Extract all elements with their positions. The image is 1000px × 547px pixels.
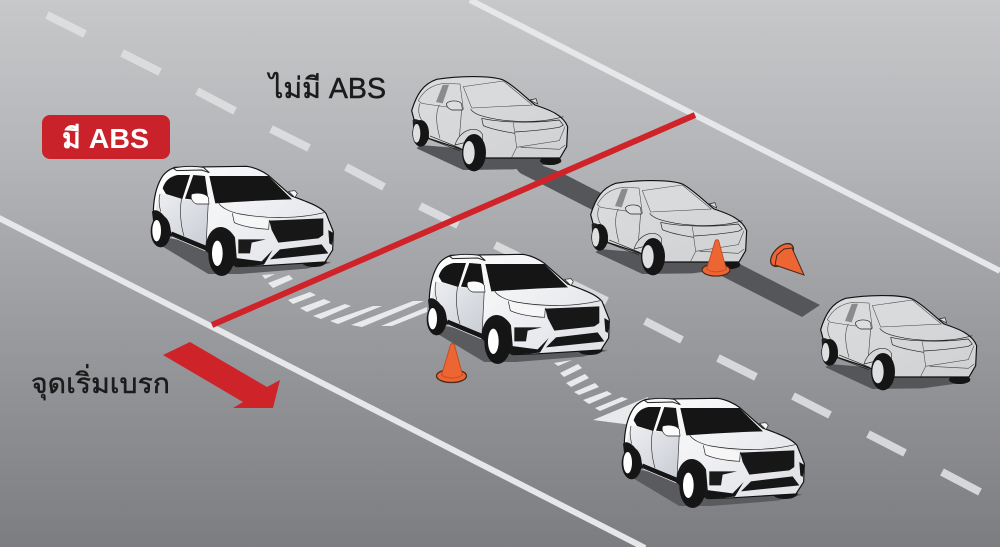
- road edge line: top: [470, 0, 1000, 271]
- label badge: with ABS: [42, 115, 170, 159]
- car: with ABS, position 2: [427, 254, 610, 364]
- label badge: with ABS: มี ABS: [62, 123, 149, 154]
- red arrow: braking direction: [163, 342, 280, 408]
- label: braking start point: จุดเริ่มเบรก: [31, 364, 170, 401]
- traffic cone: tipped over: [766, 239, 804, 275]
- label: without ABS: ไม่มี ABS: [267, 71, 386, 105]
- car: with ABS, position 1: [151, 166, 334, 276]
- car: no ABS, position 3: [821, 296, 977, 390]
- brake stripes: first group: [262, 274, 427, 327]
- red braking start line: [212, 115, 695, 325]
- road edge line: bottom: [0, 217, 645, 547]
- car: no ABS, position 1: [412, 77, 568, 171]
- car: no ABS, position 2: [591, 181, 747, 275]
- skid mark: no ABS: [500, 150, 820, 317]
- car: with ABS, position 3: [622, 398, 805, 508]
- traffic cone: left: [436, 344, 466, 382]
- brake stripes: second group: [554, 360, 648, 426]
- traffic cone: centre: [702, 240, 730, 276]
